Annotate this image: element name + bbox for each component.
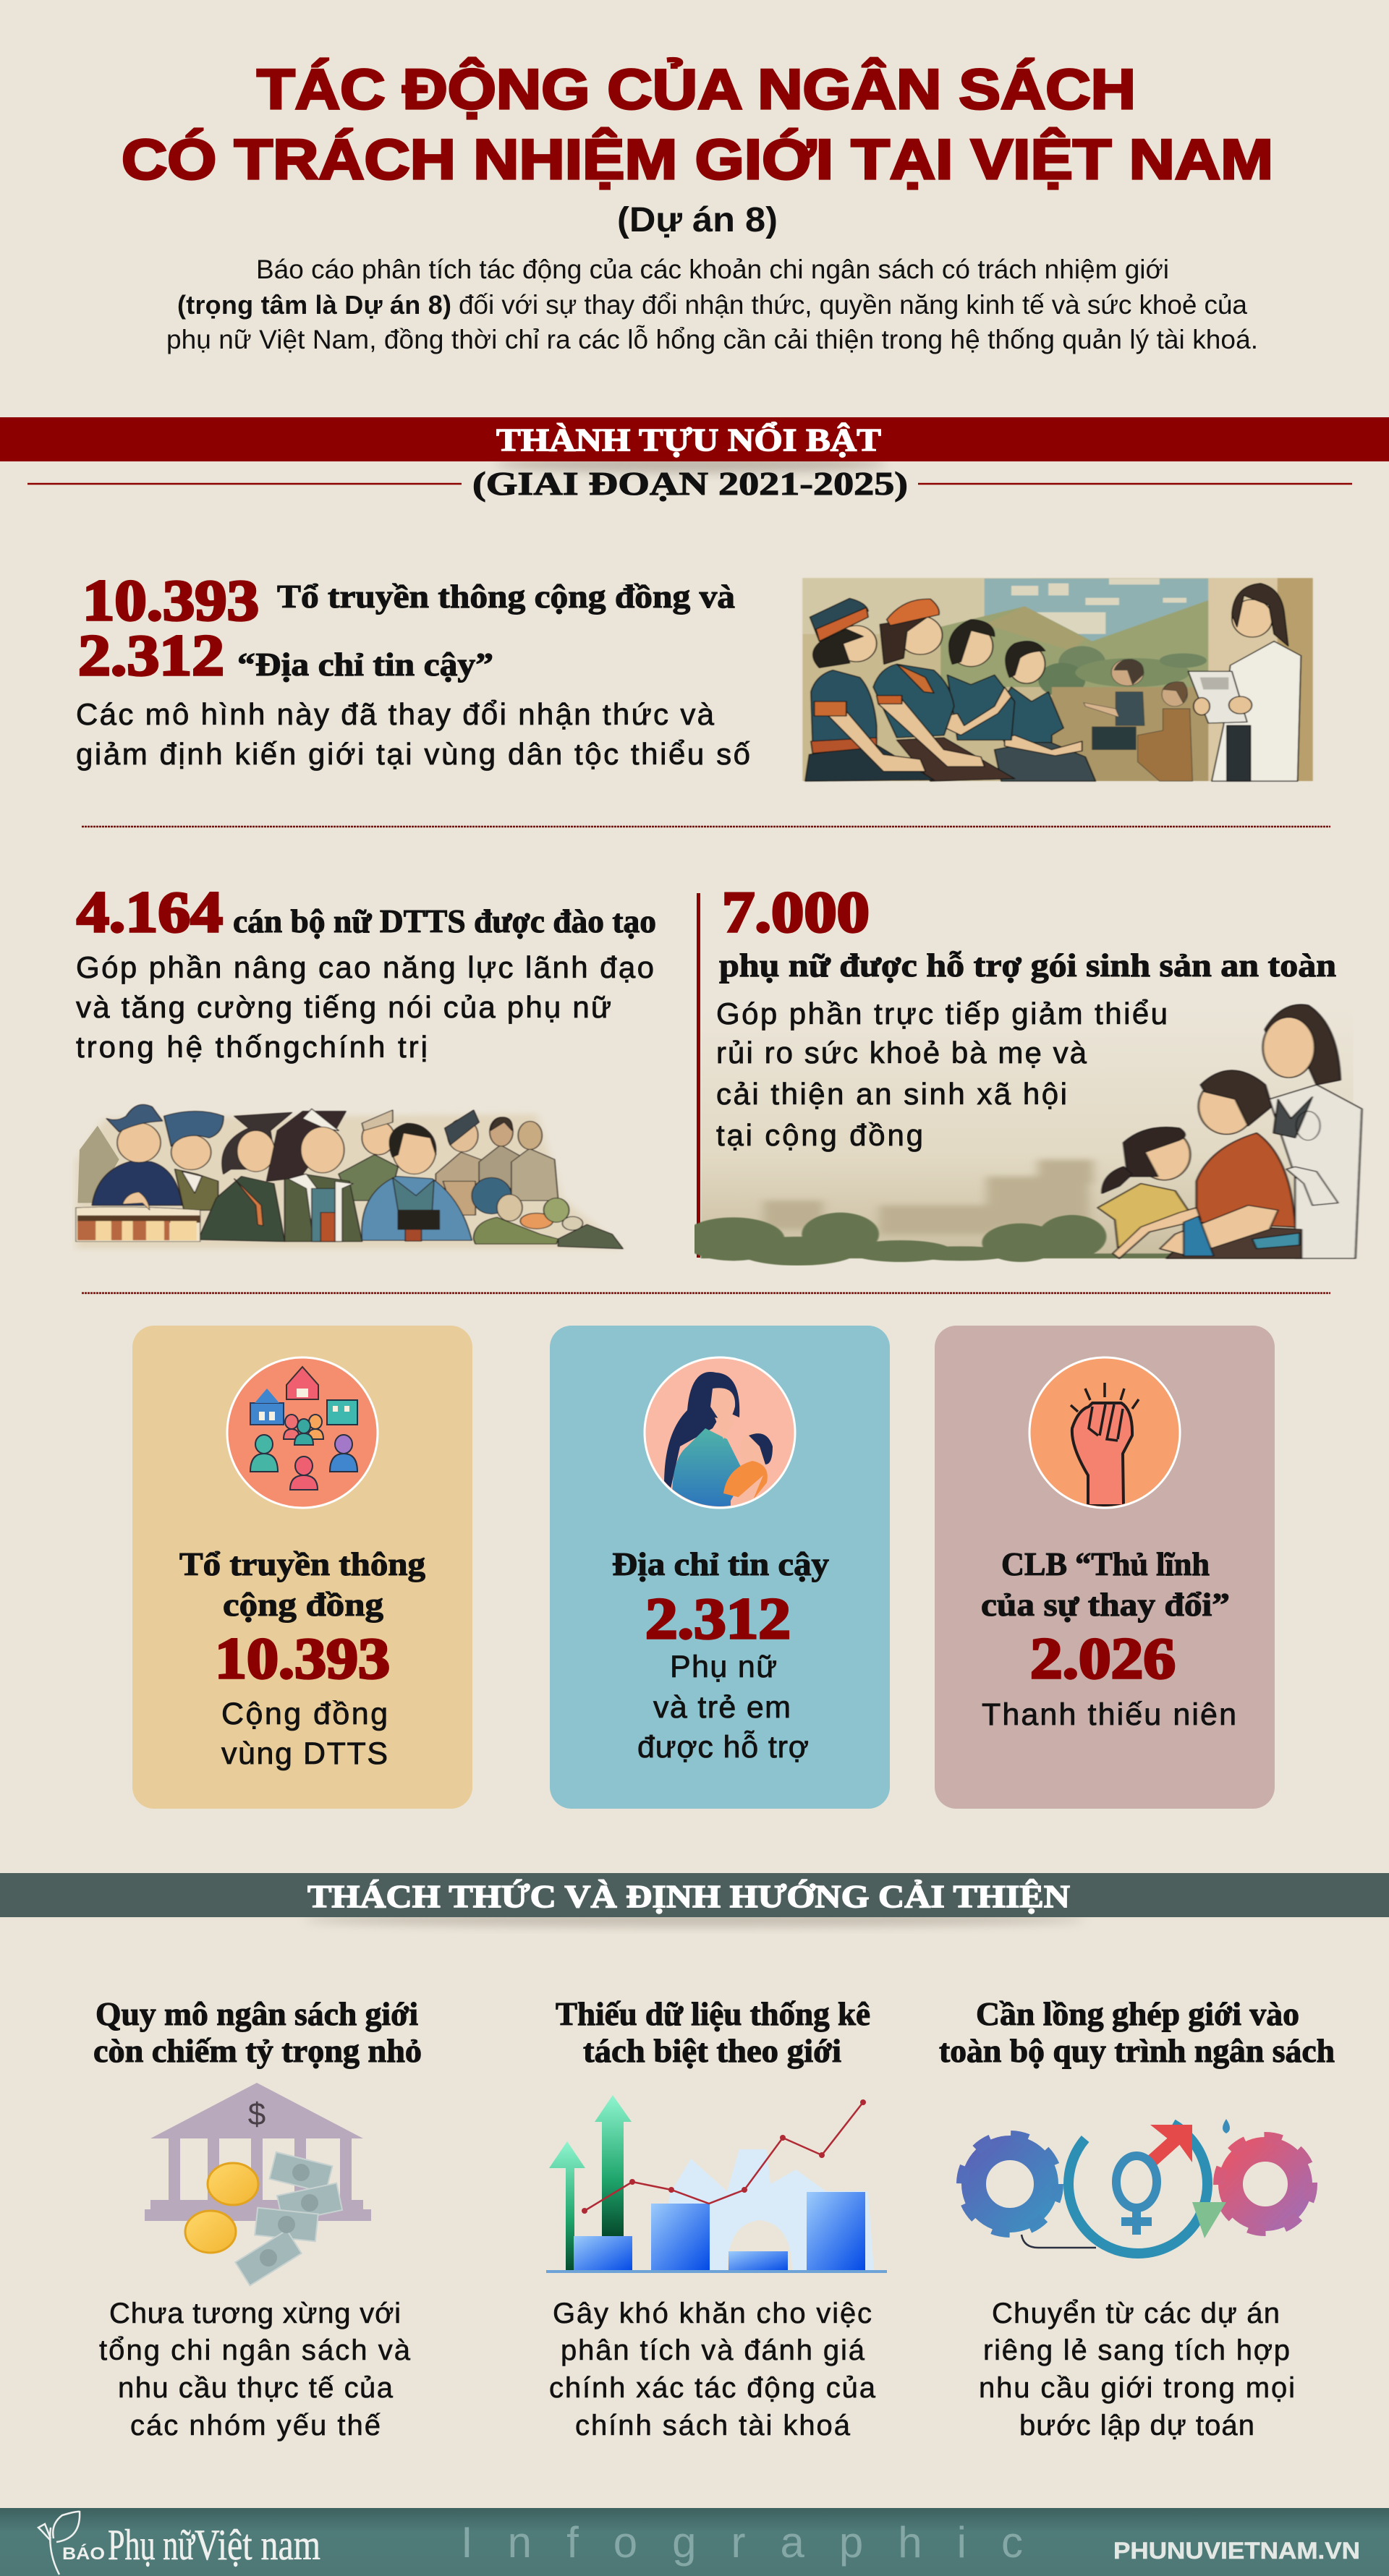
title: CÓ TRÁCH NHIỆM GIỚI TẠI VIỆT NAM bbox=[122, 127, 1273, 191]
icon: community network bbox=[227, 1357, 378, 1508]
logo bbox=[38, 2512, 320, 2575]
card number: 10.393 bbox=[215, 1627, 390, 1691]
icon: bank with coins and banknotes bbox=[145, 2083, 371, 2285]
stat block: community groups and trusted addresses: 10.393 bbox=[82, 569, 259, 633]
section banner: achievements: THÀNH TỰU NỔI BẬT bbox=[496, 421, 881, 458]
stat block: safe reproductive packages bbox=[716, 881, 1336, 1152]
card caption bbox=[637, 1650, 809, 1765]
card heading bbox=[179, 1545, 425, 1623]
footer band bbox=[0, 2508, 1389, 2576]
intro paragraph: (trọng tâm là Dự án 8) bbox=[177, 290, 451, 320]
stat block: community groups and trusted addresses: giảm định kiến giới tại vùng dân tộc thiểu số bbox=[76, 737, 750, 771]
card heading: của sự thay đổi” bbox=[981, 1586, 1230, 1623]
column text: chính xác tác động của bbox=[549, 2372, 876, 2404]
challenge: lack of sex-disaggregated data bbox=[546, 1995, 887, 2441]
card caption bbox=[221, 1697, 388, 1771]
column heading bbox=[556, 1995, 870, 2069]
card number: 2.026 bbox=[1030, 1627, 1176, 1691]
challenge: gender mainstreaming bbox=[939, 1995, 1335, 2441]
panel: trusted address card bbox=[550, 1326, 890, 1809]
stat block: community groups and trusted addresses: Các mô hình này đã thay đổi nhận thức và bbox=[76, 697, 715, 731]
logo: Phụ nữ bbox=[108, 2521, 196, 2569]
title: TÁC ĐỘNG CỦA NGÂN SÁCH bbox=[257, 57, 1136, 121]
stat block: community groups and trusted addresses: Tổ truyền thông cộng đồng và bbox=[277, 578, 735, 615]
section banner: challenges bbox=[0, 1873, 1389, 1927]
column text: phân tích và đánh giá bbox=[561, 2334, 865, 2366]
background villagers bbox=[1084, 660, 1192, 781]
column text: tổng chi ngân sách và bbox=[99, 2334, 411, 2366]
card number: 2.312 bbox=[645, 1587, 791, 1651]
intro paragraph: Báo cáo phân tích tác động của các khoản chi ngân sách có trách nhiệm giới bbox=[256, 255, 1169, 284]
stat block: trained female officials: trong hệ thốngchính trị bbox=[76, 1030, 428, 1064]
stat block: safe reproductive packages: rủi ro sức khoẻ bà mẹ và bbox=[716, 1036, 1087, 1070]
card caption: được hỗ trợ bbox=[637, 1730, 809, 1765]
seated women bbox=[805, 598, 1095, 781]
card caption: Thanh thiếu niên bbox=[982, 1697, 1236, 1732]
section banner: achievements bbox=[0, 417, 1389, 473]
stat block: trained female officials: và tăng cường tiếng nói của phụ nữ bbox=[76, 990, 611, 1024]
divider bbox=[82, 1292, 1330, 1294]
infographic label: Infographic bbox=[461, 2518, 1023, 2567]
card caption: Cộng đồng bbox=[221, 1697, 388, 1731]
card caption: vùng DTTS bbox=[221, 1736, 388, 1771]
stat block: trained female officials: cán bộ nữ DTTS được đào tạo bbox=[233, 903, 656, 939]
column heading bbox=[93, 1995, 422, 2069]
subtitle: (Dự án 8) bbox=[617, 201, 778, 239]
column text: Chuyển từ các dự án bbox=[992, 2298, 1280, 2329]
illustration: group of officials bbox=[74, 1104, 624, 1250]
illustration: ethnic minority women with a doctor bbox=[802, 577, 1314, 782]
stat block: community groups and trusted addresses: “Địa chỉ tin cậy” bbox=[237, 646, 493, 683]
panel: community groups card bbox=[132, 1326, 472, 1809]
column heading bbox=[939, 1995, 1335, 2069]
column text: Gây khó khăn cho việc bbox=[553, 2298, 872, 2329]
icon: raised fist bbox=[1029, 1357, 1180, 1508]
column text: nhu cầu giới trong mọi bbox=[979, 2372, 1295, 2404]
period heading: (GIAI ĐOẠN 2021-2025) bbox=[472, 465, 908, 502]
card heading: cộng đồng bbox=[223, 1586, 383, 1623]
chart icon: bars, arrows and trend line bbox=[546, 2095, 887, 2273]
column heading: toàn bộ quy trình ngân sách bbox=[939, 2032, 1335, 2069]
stat block: trained female officials: Góp phần nâng cao năng lực lãnh đạo bbox=[76, 950, 654, 984]
column text: riêng lẻ sang tích hợp bbox=[983, 2334, 1290, 2366]
icon: gears and gender symbols bbox=[962, 2089, 1312, 2279]
card heading bbox=[981, 1545, 1230, 1623]
stat block: safe reproductive packages: phụ nữ được hỗ trợ gói sinh sản an toàn bbox=[719, 947, 1336, 984]
icon: mother and baby bbox=[645, 1357, 795, 1511]
challenge: small gender budget bbox=[93, 1995, 422, 2441]
column text: nhu cầu thực tế của bbox=[118, 2372, 394, 2404]
column text bbox=[979, 2298, 1295, 2441]
stat block: trained female officials: 4.164 bbox=[77, 881, 223, 944]
column heading: Thiếu dữ liệu thống kê bbox=[556, 1995, 870, 2032]
intro paragraph: phụ nữ Việt Nam, đồng thời chỉ ra các lỗ hổng cần cải thiện trong hệ thống quản lý tài khoá. bbox=[166, 325, 1258, 354]
panel: change leaders club card bbox=[935, 1326, 1275, 1809]
logo: Việt nam bbox=[195, 2521, 320, 2569]
divider bbox=[82, 826, 1330, 827]
stat block: safe reproductive packages: 7.000 bbox=[722, 881, 870, 944]
column text: các nhóm yếu thế bbox=[130, 2410, 381, 2441]
card heading: CLB “Thủ lĩnh bbox=[1001, 1545, 1210, 1582]
doctor bbox=[1188, 584, 1301, 781]
stat block: safe reproductive packages: cải thiện an sinh xã hội bbox=[716, 1077, 1067, 1111]
intro paragraph: đối với sự thay đổi nhận thức, quyền năng kinh tế và sức khoẻ của bbox=[459, 290, 1247, 320]
stat block: community groups and trusted addresses bbox=[76, 569, 750, 771]
icon: bank with coins and banknotes: $ bbox=[248, 2097, 266, 2132]
website: PHUNUVIETNAM.VN bbox=[1113, 2538, 1360, 2564]
section banner: challenges: THÁCH THỨC VÀ ĐỊNH HƯỚNG CẢI THIỆN bbox=[307, 1879, 1070, 1914]
column text: bước lập dự toán bbox=[1019, 2410, 1254, 2441]
intro paragraph bbox=[166, 255, 1258, 354]
stat block: community groups and trusted addresses: 2.312 bbox=[78, 624, 224, 688]
stat block: safe reproductive packages: tại cộng đồng bbox=[716, 1118, 923, 1152]
stat block: safe reproductive packages: Góp phần trực tiếp giảm thiểu bbox=[716, 997, 1168, 1031]
column heading: Cần lồng ghép giới vào bbox=[976, 1995, 1299, 2032]
column heading: tách biệt theo giới bbox=[583, 2032, 841, 2069]
stat block: trained female officials bbox=[76, 881, 656, 1064]
column text bbox=[549, 2298, 876, 2441]
card caption: Phụ nữ bbox=[670, 1650, 777, 1684]
card heading: Tổ truyền thông bbox=[179, 1545, 425, 1582]
column text: Chưa tương xừng với bbox=[109, 2298, 401, 2329]
column text: chính sách tài khoá bbox=[575, 2410, 851, 2441]
card heading: Địa chỉ tin cậy bbox=[612, 1545, 829, 1582]
card caption: và trẻ em bbox=[653, 1690, 791, 1725]
column text bbox=[99, 2298, 411, 2441]
illustration: mother, child and doctor in a village bbox=[694, 1004, 1364, 1266]
logo: BÁO bbox=[62, 2543, 105, 2564]
title bbox=[122, 57, 1273, 191]
vertical separator bbox=[697, 893, 700, 1258]
column heading: Quy mô ngân sách giới bbox=[95, 1995, 418, 2032]
column heading: còn chiếm tỷ trọng nhỏ bbox=[93, 2032, 422, 2069]
